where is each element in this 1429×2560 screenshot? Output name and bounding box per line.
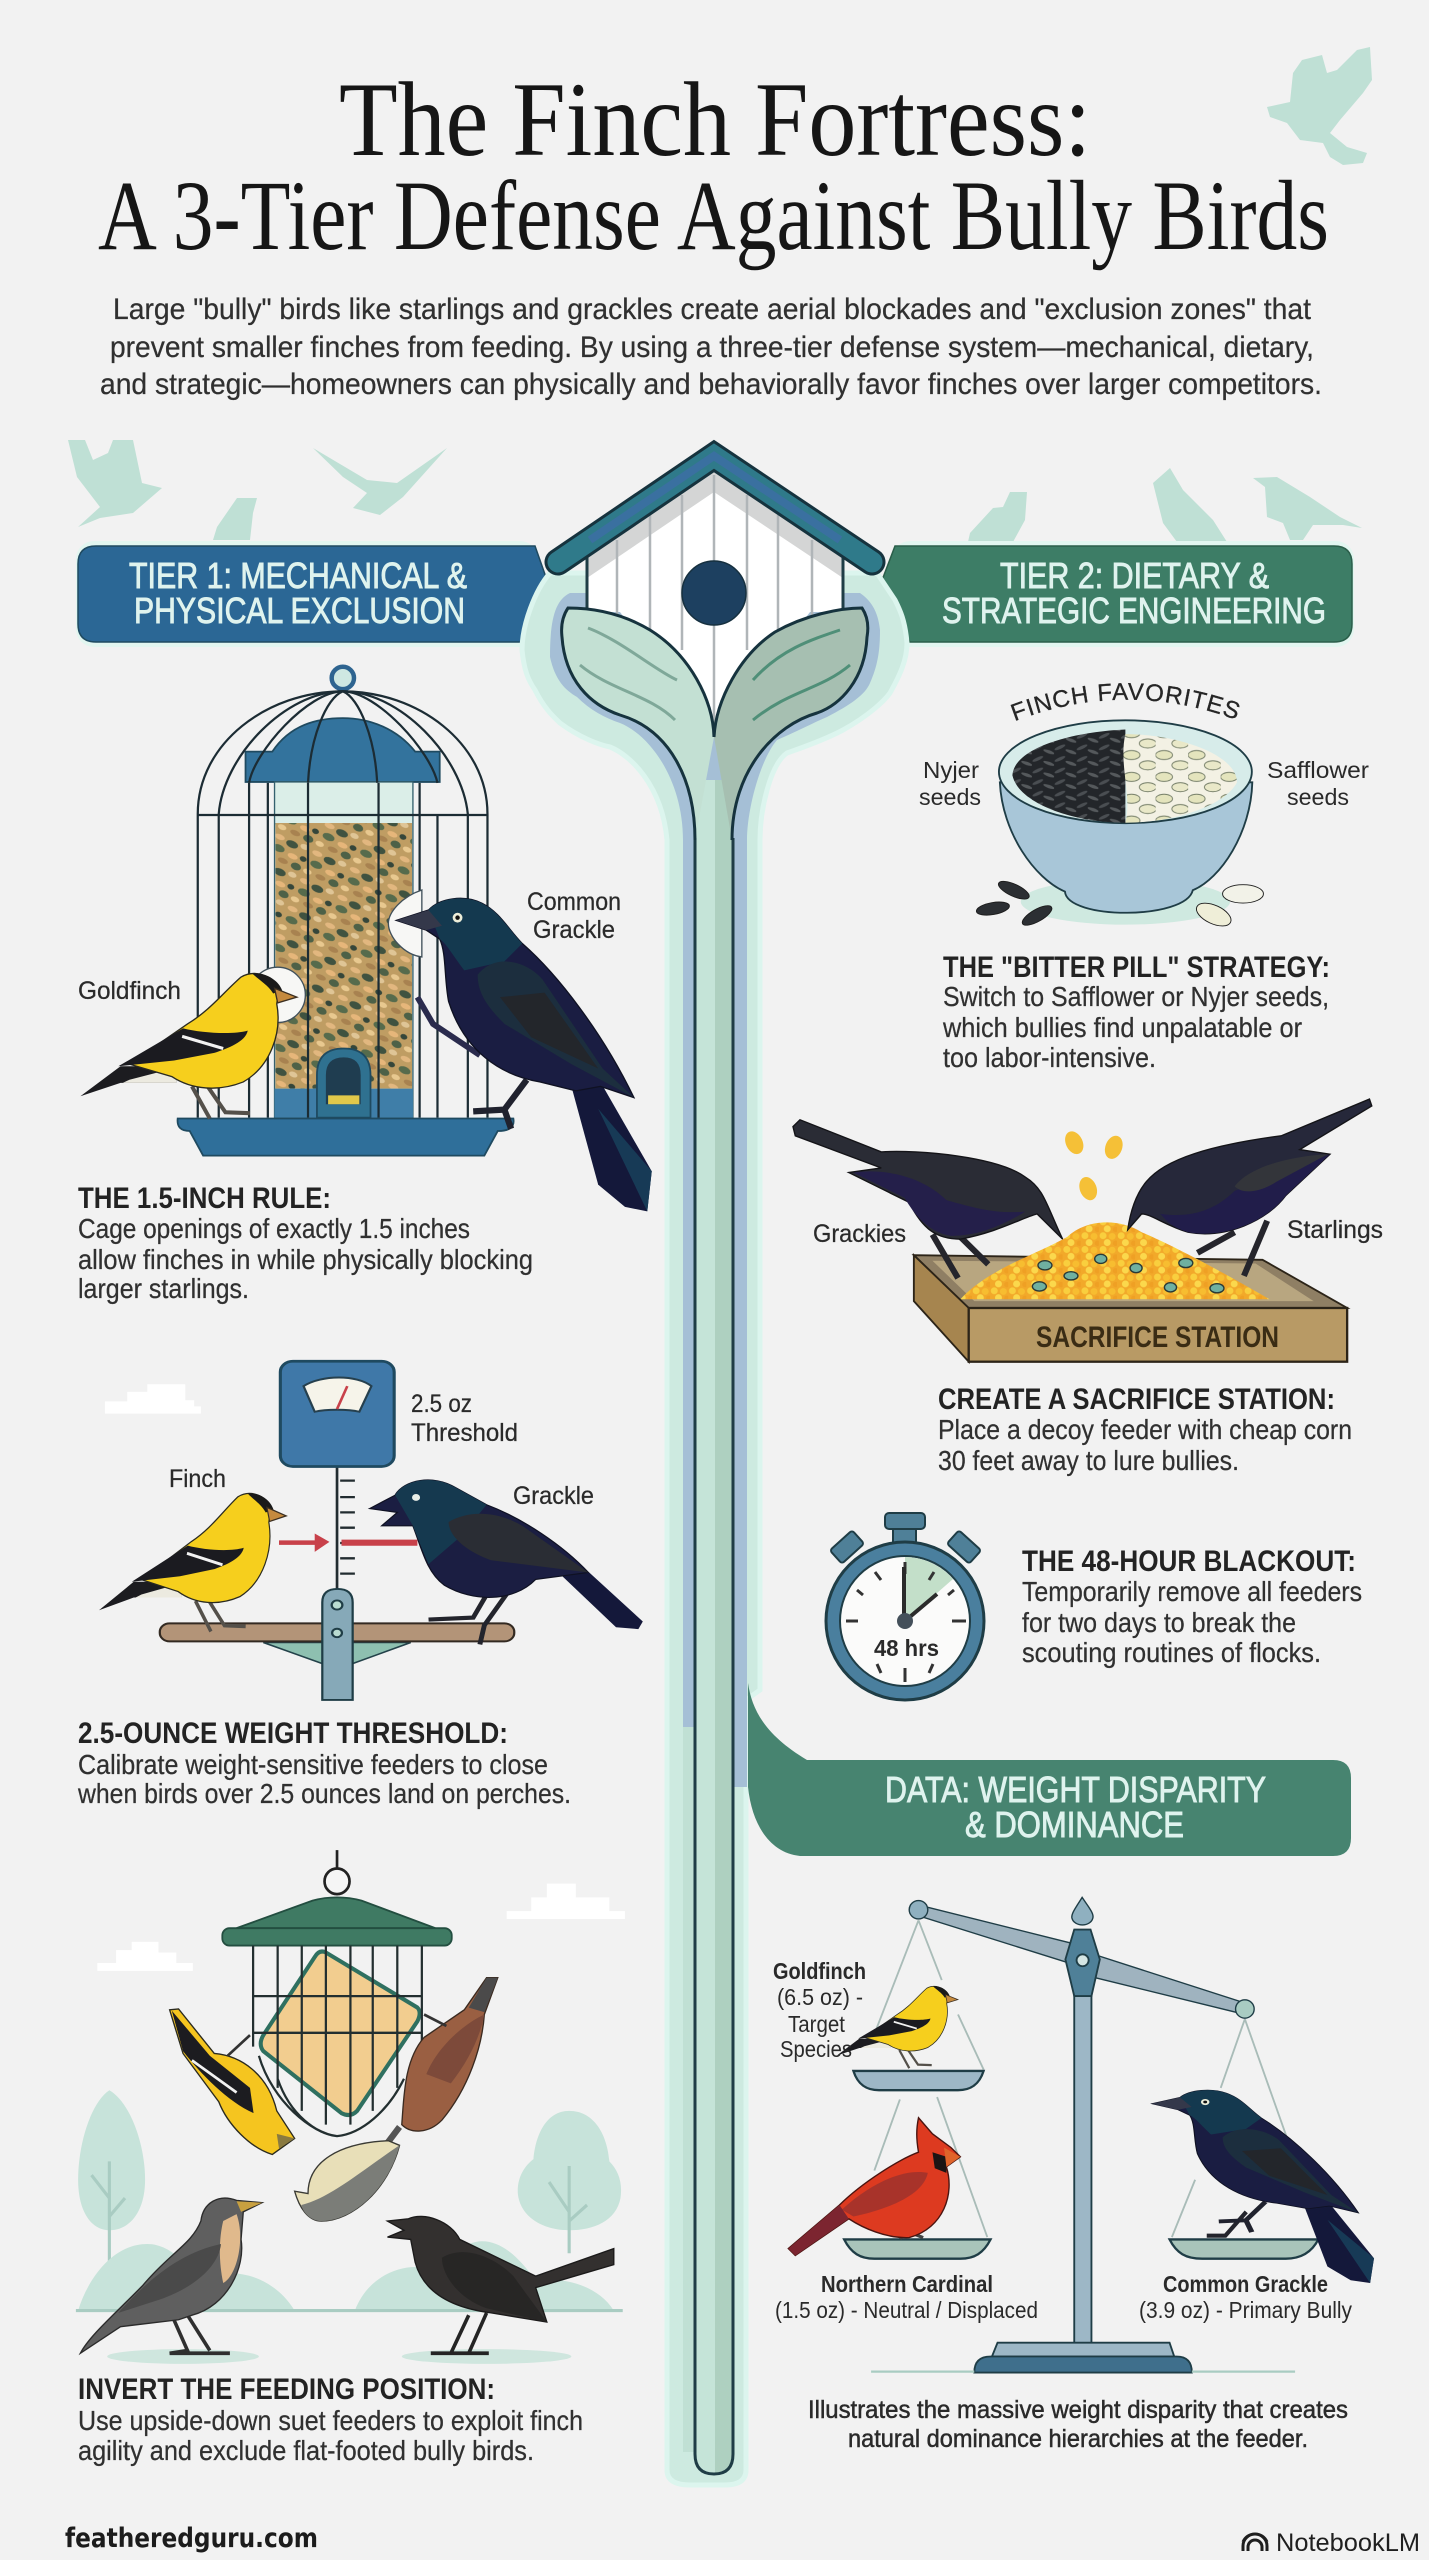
- stem lower band: [683, 1727, 697, 2452]
- clouds: [97, 1884, 625, 1971]
- illustration: upside-down suet feeder: [222, 1850, 452, 2136]
- illustration: upside-down goldfinch: [170, 2009, 295, 2154]
- tray front: [969, 1308, 1347, 1362]
- banner: data: & DOMINANCE: [965, 1804, 1184, 1845]
- watch label: 48 hrs: [874, 1635, 939, 1661]
- pan strings: [874, 1920, 1290, 2237]
- label: nyjer seeds: Nyjer: [923, 757, 979, 783]
- label: goldfinch weight: Goldfinch: [773, 1958, 866, 1984]
- label: goldfinch weight: Target: [788, 2011, 846, 2037]
- text block: invert feeding position: Use upside-down suet feeders to exploit finch: [78, 2405, 583, 2436]
- banner: data: [748, 1683, 1351, 1856]
- label: grackle weight: [1139, 2271, 1352, 2323]
- grackle second leg: [1207, 2212, 1246, 2236]
- corn pile: [960, 1222, 1270, 1299]
- illustration: balance scale: [844, 1897, 1318, 2373]
- elapsed wedge: [905, 1557, 953, 1621]
- illustration: goldfinch on scale: [837, 1986, 958, 2068]
- title: [98, 61, 1329, 271]
- ground line: [76, 2307, 623, 2314]
- lower left pan: [844, 2239, 991, 2259]
- illustration: sacrifice station tray: [793, 1099, 1372, 1362]
- illustration: finch on perch: [99, 1493, 286, 1632]
- ground line: [871, 2369, 1295, 2374]
- right tree: [518, 2111, 621, 2230]
- starling feeding: [1197, 1221, 1267, 1276]
- perch: [160, 1623, 514, 1641]
- illustration: grackle on perch: [370, 1480, 643, 1644]
- finial: [1072, 1897, 1093, 1925]
- intro paragraph: [100, 293, 1322, 401]
- label: cardinal weight: Northern Cardinal: [821, 2271, 993, 2297]
- braces: [263, 1643, 411, 1664]
- text block: 1.5-inch rule: [78, 1182, 533, 1304]
- footer: site name: featheredguru.com: [65, 2523, 318, 2554]
- label: sacrifice station: SACRIFICE STATION: [1036, 1321, 1279, 1354]
- hanger: [334, 1850, 340, 1868]
- threshold arrow: [279, 1533, 417, 1552]
- intro paragraph: Large "bully" birds like starlings and grackles create aerial blockades and "exclusion zones" that: [113, 293, 1312, 326]
- hanger ring: [332, 667, 354, 689]
- bushes: [78, 2241, 614, 2311]
- label: grackle weight: Common Grackle: [1163, 2271, 1328, 2297]
- banner: tier 1: [76, 541, 548, 647]
- safflower seeds: [1123, 734, 1237, 823]
- text block: 48-hour blackout: scouting routines of flocks.: [1022, 1637, 1321, 1668]
- text block: bitter pill: Switch to Safflower or Nyjer seeds,: [943, 981, 1329, 1012]
- green roof: [237, 1897, 435, 1928]
- loose seeds: [975, 878, 1263, 931]
- birdhouse body: [587, 465, 843, 737]
- birdhouse hole: [682, 561, 746, 625]
- label: goldfinch weight: [773, 1958, 866, 2062]
- icon: stopwatch: [826, 1513, 984, 1700]
- upper left pan: [853, 2071, 984, 2090]
- cloud: [105, 1384, 201, 1414]
- left tree: [78, 2090, 145, 2230]
- feeder cap: [246, 718, 440, 782]
- right leaf: [714, 608, 868, 840]
- text block: sacrifice station: CREATE A SACRIFICE STATION:: [938, 1383, 1335, 1416]
- text block: bitter pill: too labor-intensive.: [943, 1042, 1156, 1073]
- banner: tier 2: TIER 2: DIETARY &: [1000, 555, 1269, 596]
- label: common grackle: Common: [527, 888, 621, 916]
- pivot: [1065, 1930, 1100, 1996]
- caption: scale explanation: natural dominance hierarchies at the feeder.: [848, 2425, 1308, 2453]
- illustration: park background: [76, 1884, 625, 2364]
- label: finch: Finch: [169, 1465, 226, 1493]
- caption: scale explanation: [808, 2396, 1348, 2453]
- bowl shadow: [1021, 879, 1230, 925]
- right pan: [1170, 2239, 1318, 2259]
- banner: tier 1: PHYSICAL EXCLUSION: [134, 590, 465, 631]
- text block: bitter pill: THE "BITTER PILL" STRATEGY:: [943, 951, 1330, 984]
- corn rings: [1032, 1254, 1224, 1293]
- stem outline: [695, 838, 733, 2474]
- text block: weight threshold: Calibrate weight-sensitive feeders to close: [78, 1749, 548, 1780]
- text block: 1.5-inch rule: allow finches in while physically blocking: [78, 1244, 533, 1275]
- tray: [178, 1119, 514, 1156]
- label: nyjer seeds: seeds: [919, 784, 981, 810]
- bowl rim: [999, 720, 1252, 823]
- text block: 48-hour blackout: THE 48-HOUR BLACKOUT:: [1022, 1545, 1356, 1578]
- decorative bird silhouette top right: [1267, 47, 1372, 165]
- grackle gripping leg: [417, 997, 480, 1055]
- label: grackies: Grackies: [813, 1220, 906, 1248]
- label: common grackle: Grackle: [533, 916, 615, 944]
- dial: [304, 1377, 371, 1412]
- footer: notebooklm logo: NotebookLM: [1276, 2529, 1420, 2557]
- intro paragraph: prevent smaller finches from feeding. By using a three-tier defense system—mechanical, dietary,: [110, 331, 1314, 364]
- bowl body: [1000, 782, 1252, 913]
- text block: 48-hour blackout: Temporarily remove all feeders: [1022, 1576, 1362, 1607]
- label: common grackle: [527, 888, 621, 944]
- label: starlings: Starlings: [1287, 1216, 1383, 1244]
- left leaf: [562, 608, 714, 840]
- banner: tier 1: TIER 1: MECHANICAL &: [129, 555, 467, 596]
- text block: 1.5-inch rule: THE 1.5-INCH RULE:: [78, 1182, 331, 1215]
- falling corn: [1062, 1128, 1126, 1203]
- label: cardinal weight: (1.5 oz) - Neutral / Displaced: [775, 2297, 1038, 2323]
- side buttons: [830, 1530, 864, 1564]
- label: safflower seeds: [1267, 757, 1369, 810]
- text block: weight threshold: 2.5-OUNCE WEIGHT THRESHOLD:: [78, 1717, 508, 1750]
- text block: invert feeding position: INVERT THE FEEDING POSITION:: [78, 2373, 495, 2406]
- text block: 1.5-inch rule: Cage openings of exactly 1.5 inches: [78, 1213, 470, 1244]
- label: 2.5 oz threshold: Threshold: [411, 1419, 518, 1447]
- label: goldfinch: Goldfinch: [78, 977, 181, 1005]
- text block: 48-hour blackout: [1022, 1545, 1362, 1668]
- nyjer seeds: [1012, 730, 1125, 823]
- label: grackle: Grackle: [513, 1482, 594, 1510]
- illustration: upside-down nuthatch: [295, 2127, 400, 2221]
- seed fill: [275, 823, 412, 1089]
- text block: weight threshold: [77, 1717, 571, 1809]
- suet cake: [261, 1952, 420, 2115]
- ground shadows: [107, 2349, 259, 2364]
- label: goldfinch weight: Species: [780, 2036, 852, 2062]
- illustration: blackbird on the ground: [387, 2216, 614, 2353]
- illustration: robin on the ground: [80, 2198, 262, 2353]
- illustration: cardinal on scale: [788, 2118, 960, 2255]
- stem blue shadow: [550, 593, 880, 1787]
- text block: invert feeding position: agility and exclude flat-footed bully birds.: [78, 2435, 534, 2466]
- base: [992, 2343, 1174, 2356]
- title: The Finch Fortress:: [339, 61, 1091, 178]
- text block: sacrifice station: [938, 1383, 1352, 1476]
- hands: [904, 1567, 937, 1621]
- bracket: [322, 1589, 353, 1700]
- caption: scale explanation: Illustrates the massive weight disparity that creates: [808, 2396, 1348, 2424]
- text block: sacrifice station: Place a decoy feeder with cheap corn: [938, 1414, 1352, 1445]
- illustration: grackle on scale: [1152, 2090, 1374, 2283]
- banner: data: DATA: WEIGHT DISPARITY: [885, 1769, 1266, 1810]
- rod and ticks: [337, 1466, 355, 1591]
- label: nyjer seeds: [919, 757, 981, 810]
- text block: weight threshold: when birds over 2.5 ounces land on perches.: [77, 1778, 571, 1809]
- text block: 48-hour blackout: for two days to break the: [1022, 1607, 1296, 1638]
- label: goldfinch weight: (6.5 oz) -: [777, 1984, 863, 2010]
- illustration: goldfinch at cage: [80, 973, 297, 1119]
- intro paragraph: and strategic—homeowners can physically and behaviorally favor finches over larger competitors.: [100, 368, 1322, 401]
- stem left half: [695, 780, 715, 2474]
- crown: [893, 1528, 916, 1544]
- cage wires: [198, 691, 487, 1118]
- label: 2.5 oz threshold: [411, 1390, 518, 1447]
- label: grackle weight: (3.9 oz) - Primary Bully: [1139, 2297, 1352, 2323]
- feeder base: [275, 1089, 413, 1118]
- beam: [919, 1905, 1245, 2014]
- text block: bitter pill: which bullies find unpalatable or: [942, 1012, 1302, 1043]
- feeder tube: [275, 782, 413, 1118]
- tray inside: [914, 1255, 1347, 1308]
- illustration: caged tube feeder: [178, 667, 514, 1156]
- label: cardinal weight: [775, 2271, 1038, 2323]
- banner: tier 2: STRATEGIC ENGINEERING: [942, 590, 1326, 631]
- text block: bitter pill: [942, 951, 1330, 1073]
- text block: sacrifice station: 30 feet away to lure bullies.: [938, 1445, 1239, 1476]
- tick marks: [846, 1562, 966, 1682]
- decorative flock silhouettes: [68, 440, 1362, 542]
- illustration: grackle at cage: [396, 898, 652, 1211]
- central stem with birdhouse and leaves: [522, 456, 907, 2485]
- text block: invert feeding position: [78, 2373, 583, 2466]
- illustration: seed bowl: [975, 720, 1263, 931]
- birdhouse roof: [558, 456, 872, 562]
- illustration: weight-sensitive perch: [105, 1361, 514, 1700]
- post: [1074, 1996, 1091, 2345]
- grackle feeding: [932, 1235, 988, 1278]
- stem right half: [715, 780, 733, 2474]
- label: safflower seeds: seeds: [1287, 784, 1349, 810]
- text block: 1.5-inch rule: larger starlings.: [78, 1273, 249, 1304]
- case: [826, 1542, 984, 1700]
- tray side: [914, 1255, 969, 1362]
- illustration: upside-down brown bird: [402, 1978, 498, 2131]
- curved label: finch favorites: FINCH FAVORITES: [1010, 683, 1240, 721]
- label: 2.5 oz threshold: 2.5 oz: [411, 1390, 472, 1418]
- label: safflower seeds: Safflower: [1267, 757, 1369, 783]
- stem halo: [522, 573, 907, 2485]
- cage bars: [253, 1946, 422, 2136]
- scale box: [280, 1361, 394, 1466]
- feeder openings: [388, 890, 422, 957]
- banner: tier 2: [881, 541, 1354, 647]
